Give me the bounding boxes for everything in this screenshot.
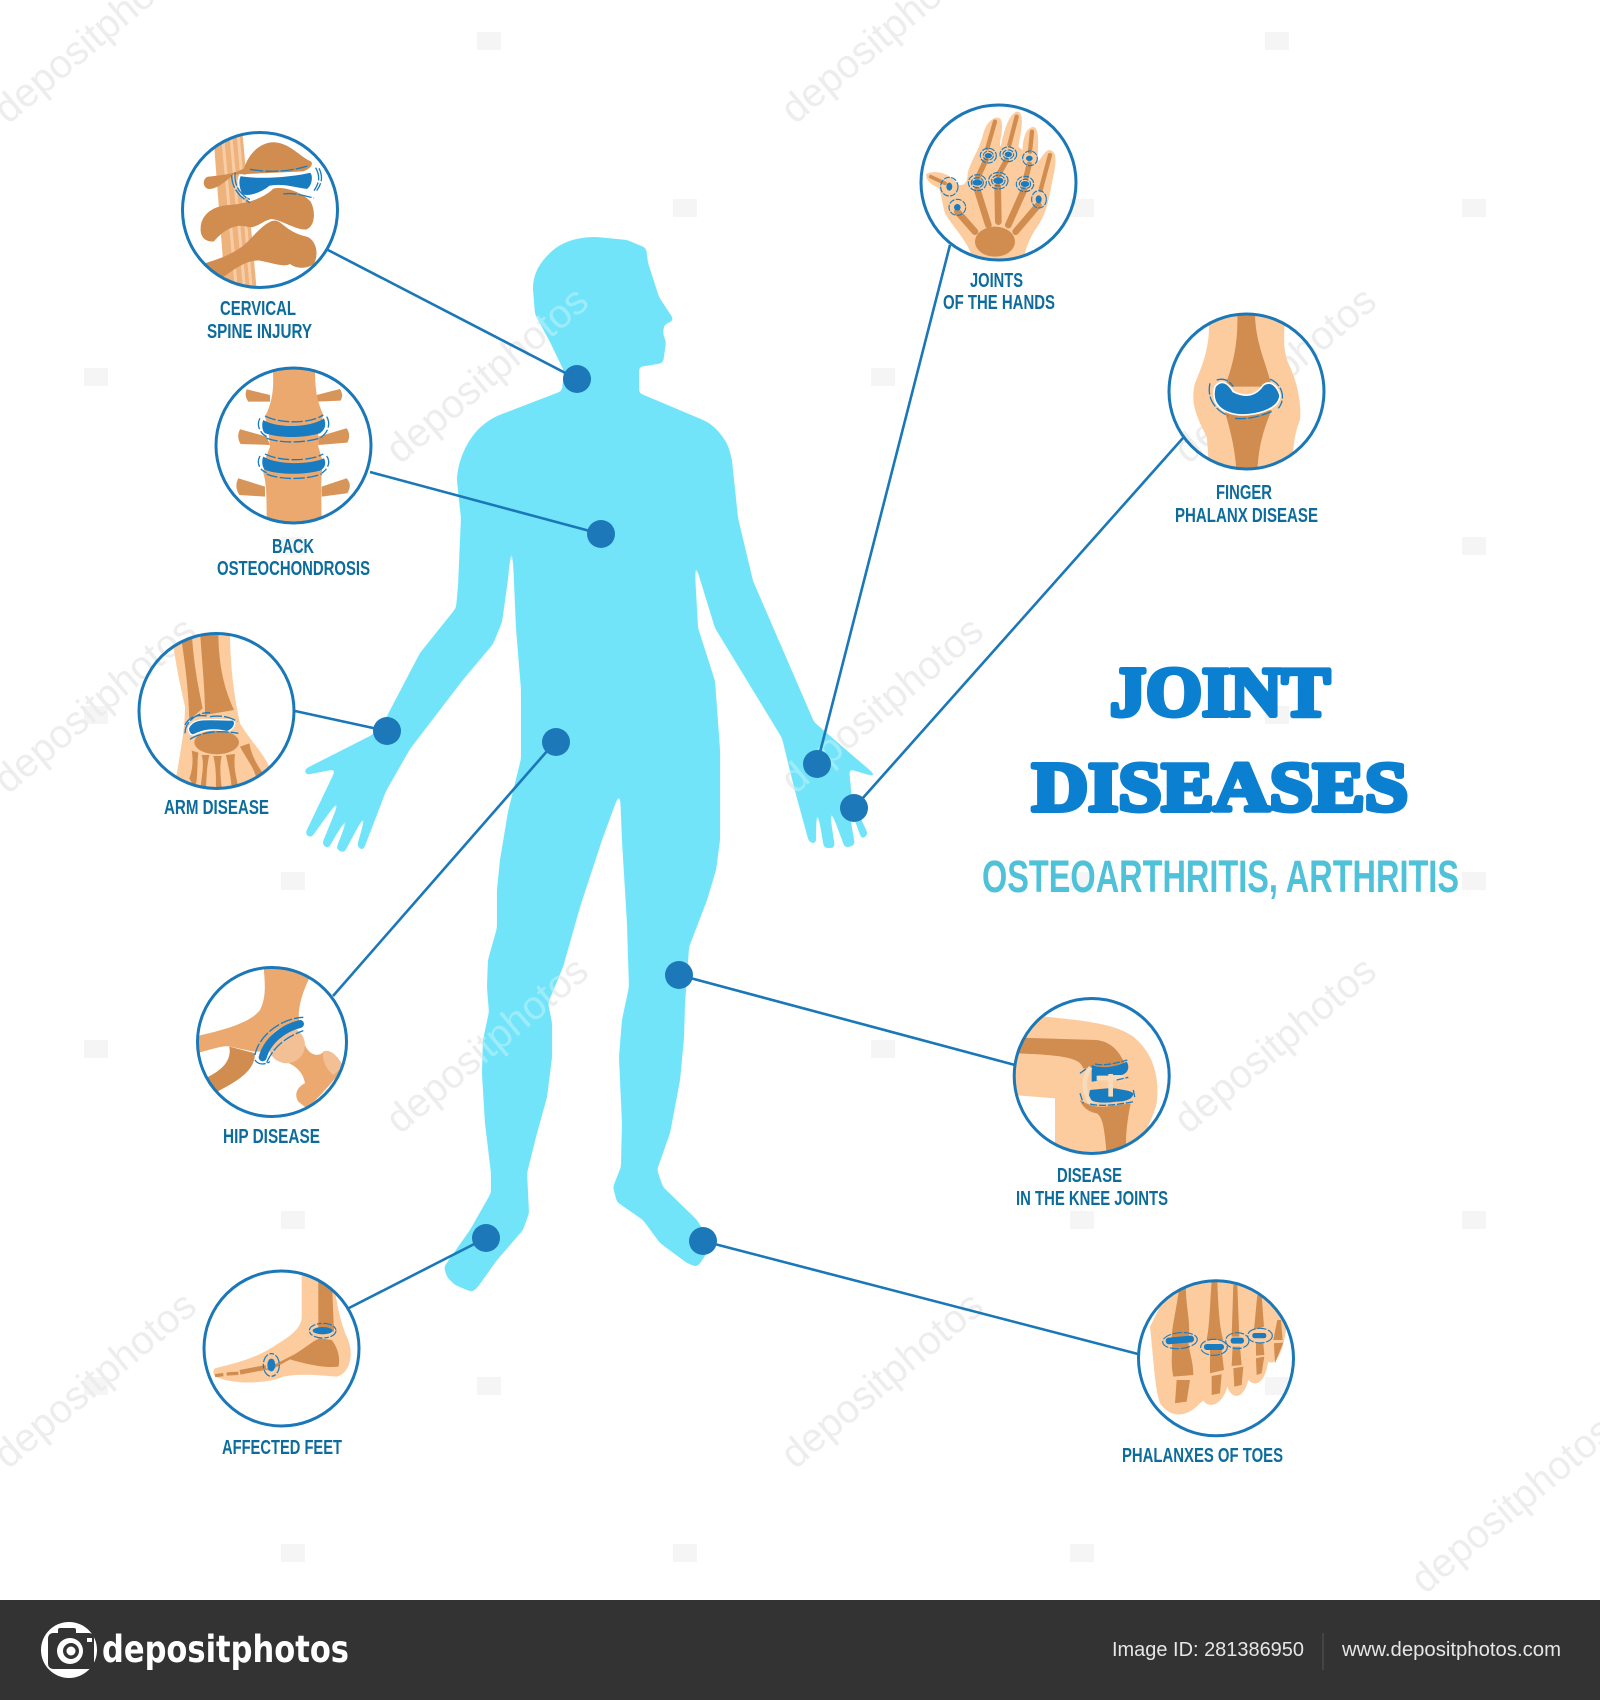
- footer banner: [0, 1600, 1600, 1700]
- label: hip disease: HIP DISEASE: [223, 1126, 320, 1148]
- title: joint diseases: DISEASES: [1032, 750, 1408, 826]
- panel: back osteochondrosis: [216, 367, 371, 580]
- panel: finger phalanx disease: [1169, 312, 1324, 527]
- label: joints of the hands: OF THE HANDS: [943, 292, 1055, 314]
- label: cervical spine injury: CERVICAL: [220, 298, 296, 320]
- panel: phalanxes of toes: [1122, 1280, 1294, 1467]
- label: back osteochondrosis: BACK: [272, 536, 314, 558]
- watermark: depositphotos repeated: depositphotos: [1166, 278, 1385, 472]
- watermark: depositphotos repeated: depositphotos: [1166, 948, 1385, 1142]
- label: disease in the knee joints: IN THE KNEE JOINTS: [1016, 1188, 1168, 1210]
- image id: Image ID: 281386950: [1112, 1639, 1304, 1661]
- connector lines: [295, 245, 1183, 1354]
- panel: hip disease: [195, 963, 346, 1148]
- website: www.depositphotos.com: [1341, 1639, 1561, 1661]
- label: phalanxes of toes: PHALANXES OF TOES: [1122, 1445, 1283, 1467]
- label: cervical spine injury: SPINE INJURY: [207, 321, 312, 343]
- human body silhouette: [305, 237, 879, 1292]
- label: back osteochondrosis: OSTEOCHONDROSIS: [217, 558, 370, 580]
- label: arm disease: ARM DISEASE: [164, 797, 269, 819]
- label: affected feet: AFFECTED FEET: [222, 1437, 342, 1459]
- watermark: camera stamps: [84, 32, 1486, 1562]
- panel: affected feet: [204, 1270, 359, 1459]
- watermark over the body: [378, 278, 992, 1142]
- panel: joints of the hands: [921, 105, 1076, 314]
- panel: disease in the knee joints: [1013, 998, 1169, 1210]
- title: joint diseases: [1032, 654, 1408, 826]
- label: joints of the hands: JOINTS: [970, 270, 1023, 292]
- label: disease in the knee joints: DISEASE: [1057, 1165, 1122, 1187]
- label: finger phalanx disease: FINGER: [1216, 482, 1272, 504]
- panel: arm disease: [139, 630, 294, 819]
- watermark: depositphotos repeated: depositphotos: [773, 1283, 992, 1477]
- logo wordmark: depositphotos: [102, 1628, 349, 1671]
- icon: depositphotos camera logo: [41, 1622, 97, 1678]
- title: joint diseases: JOINT: [1110, 654, 1330, 732]
- label: finger phalanx disease: PHALANX DISEASE: [1175, 505, 1318, 527]
- panel: cervical spine injury: [182, 132, 338, 343]
- joint marker dots: [373, 365, 868, 1255]
